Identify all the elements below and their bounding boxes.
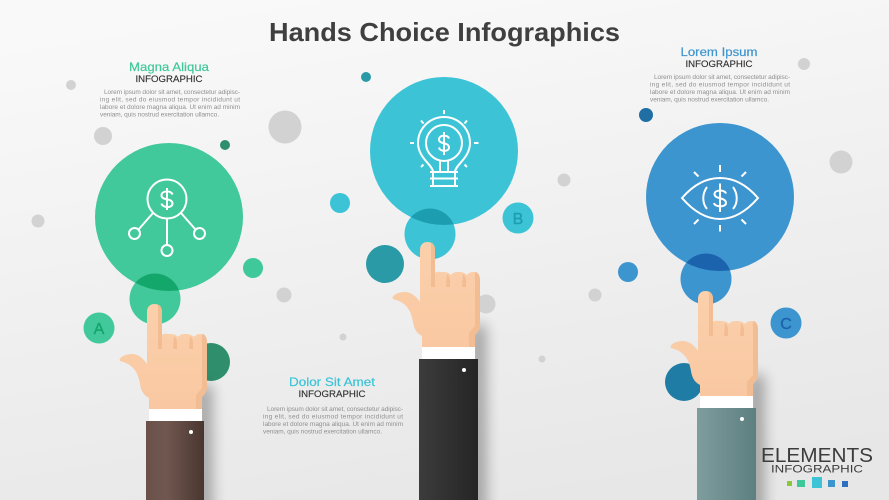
badge C — [770, 308, 802, 338]
body text — [263, 406, 403, 436]
body text: Lorem ipsum dolor sit amet, consectetur adipisc- — [267, 406, 403, 413]
option B circles — [330, 72, 534, 283]
body text — [650, 74, 790, 104]
heading: Magna Aliqua — [129, 60, 209, 74]
hand B with black sleeve — [393, 242, 486, 500]
text block: Magna Aliqua — [100, 60, 240, 118]
subheading: INFOGRAPHIC — [298, 389, 366, 400]
pointer circle — [130, 274, 180, 324]
hand C with grey-green sleeve — [671, 291, 764, 500]
badge A: A — [94, 321, 105, 338]
body text: veniam, quis nostrud exercitation ullamco. — [650, 96, 769, 104]
title: Hands Choice Infographics — [269, 17, 620, 47]
option C circles — [618, 108, 802, 401]
icon: eye dollar — [682, 165, 758, 232]
icon: light bulb dollar — [410, 110, 478, 186]
body text: labore et dolore magna aliqua. Ut enim ad minim — [263, 421, 403, 428]
main blue circle — [646, 123, 794, 271]
heading: Dolor Sit Amet — [289, 375, 376, 389]
body text: Lorem ipsum dolor sit amet, consectetur adipisc- — [104, 89, 240, 96]
body text: ing elit, sed do eiusmod tempor incididunt ut — [650, 82, 790, 88]
hand A with brown sleeve — [120, 304, 212, 500]
option A circles — [84, 140, 263, 381]
body text: veniam, quis nostrud exercitation ullamco. — [263, 428, 382, 436]
body text: ing elit, sed do eiusmod tempor incididunt ut — [100, 96, 240, 104]
pointer circle — [404, 208, 456, 260]
pointer circle — [680, 254, 732, 304]
subheading: INFOGRAPHIC — [686, 59, 753, 70]
text block: Lorem Ipsum — [650, 45, 790, 104]
badge B: B — [513, 211, 523, 228]
icon: network dollar — [129, 180, 205, 256]
decorative gray dots — [32, 58, 852, 362]
logo: elements infographic — [761, 444, 873, 488]
body text: labore et dolore magna aliqua. Ut enim ad minim — [650, 89, 790, 96]
main teal circle — [370, 77, 518, 225]
body text — [100, 89, 240, 118]
heading: Lorem Ipsum — [680, 45, 758, 59]
logo: elements infographic: ELEMENTS — [761, 444, 873, 467]
badge A — [84, 312, 114, 344]
main green circle — [95, 143, 243, 291]
subheading: INFOGRAPHIC — [136, 74, 203, 85]
body text: veniam, quis nostrud exercitation ullamco. — [100, 112, 219, 118]
logo: elements infographic: INFOGRAPHIC — [771, 464, 863, 476]
badge B — [502, 202, 534, 234]
body text: labore et dolore magna aliqua. Ut enim ad minim — [100, 104, 240, 111]
body text: Lorem ipsum dolor sit amet, consectetur adipisc- — [654, 74, 790, 81]
body text: ing elit, sed do eiusmod tempor incididunt ut — [263, 414, 403, 420]
text block: Dolor Sit Amet — [263, 375, 403, 436]
badge C: C — [780, 316, 792, 333]
